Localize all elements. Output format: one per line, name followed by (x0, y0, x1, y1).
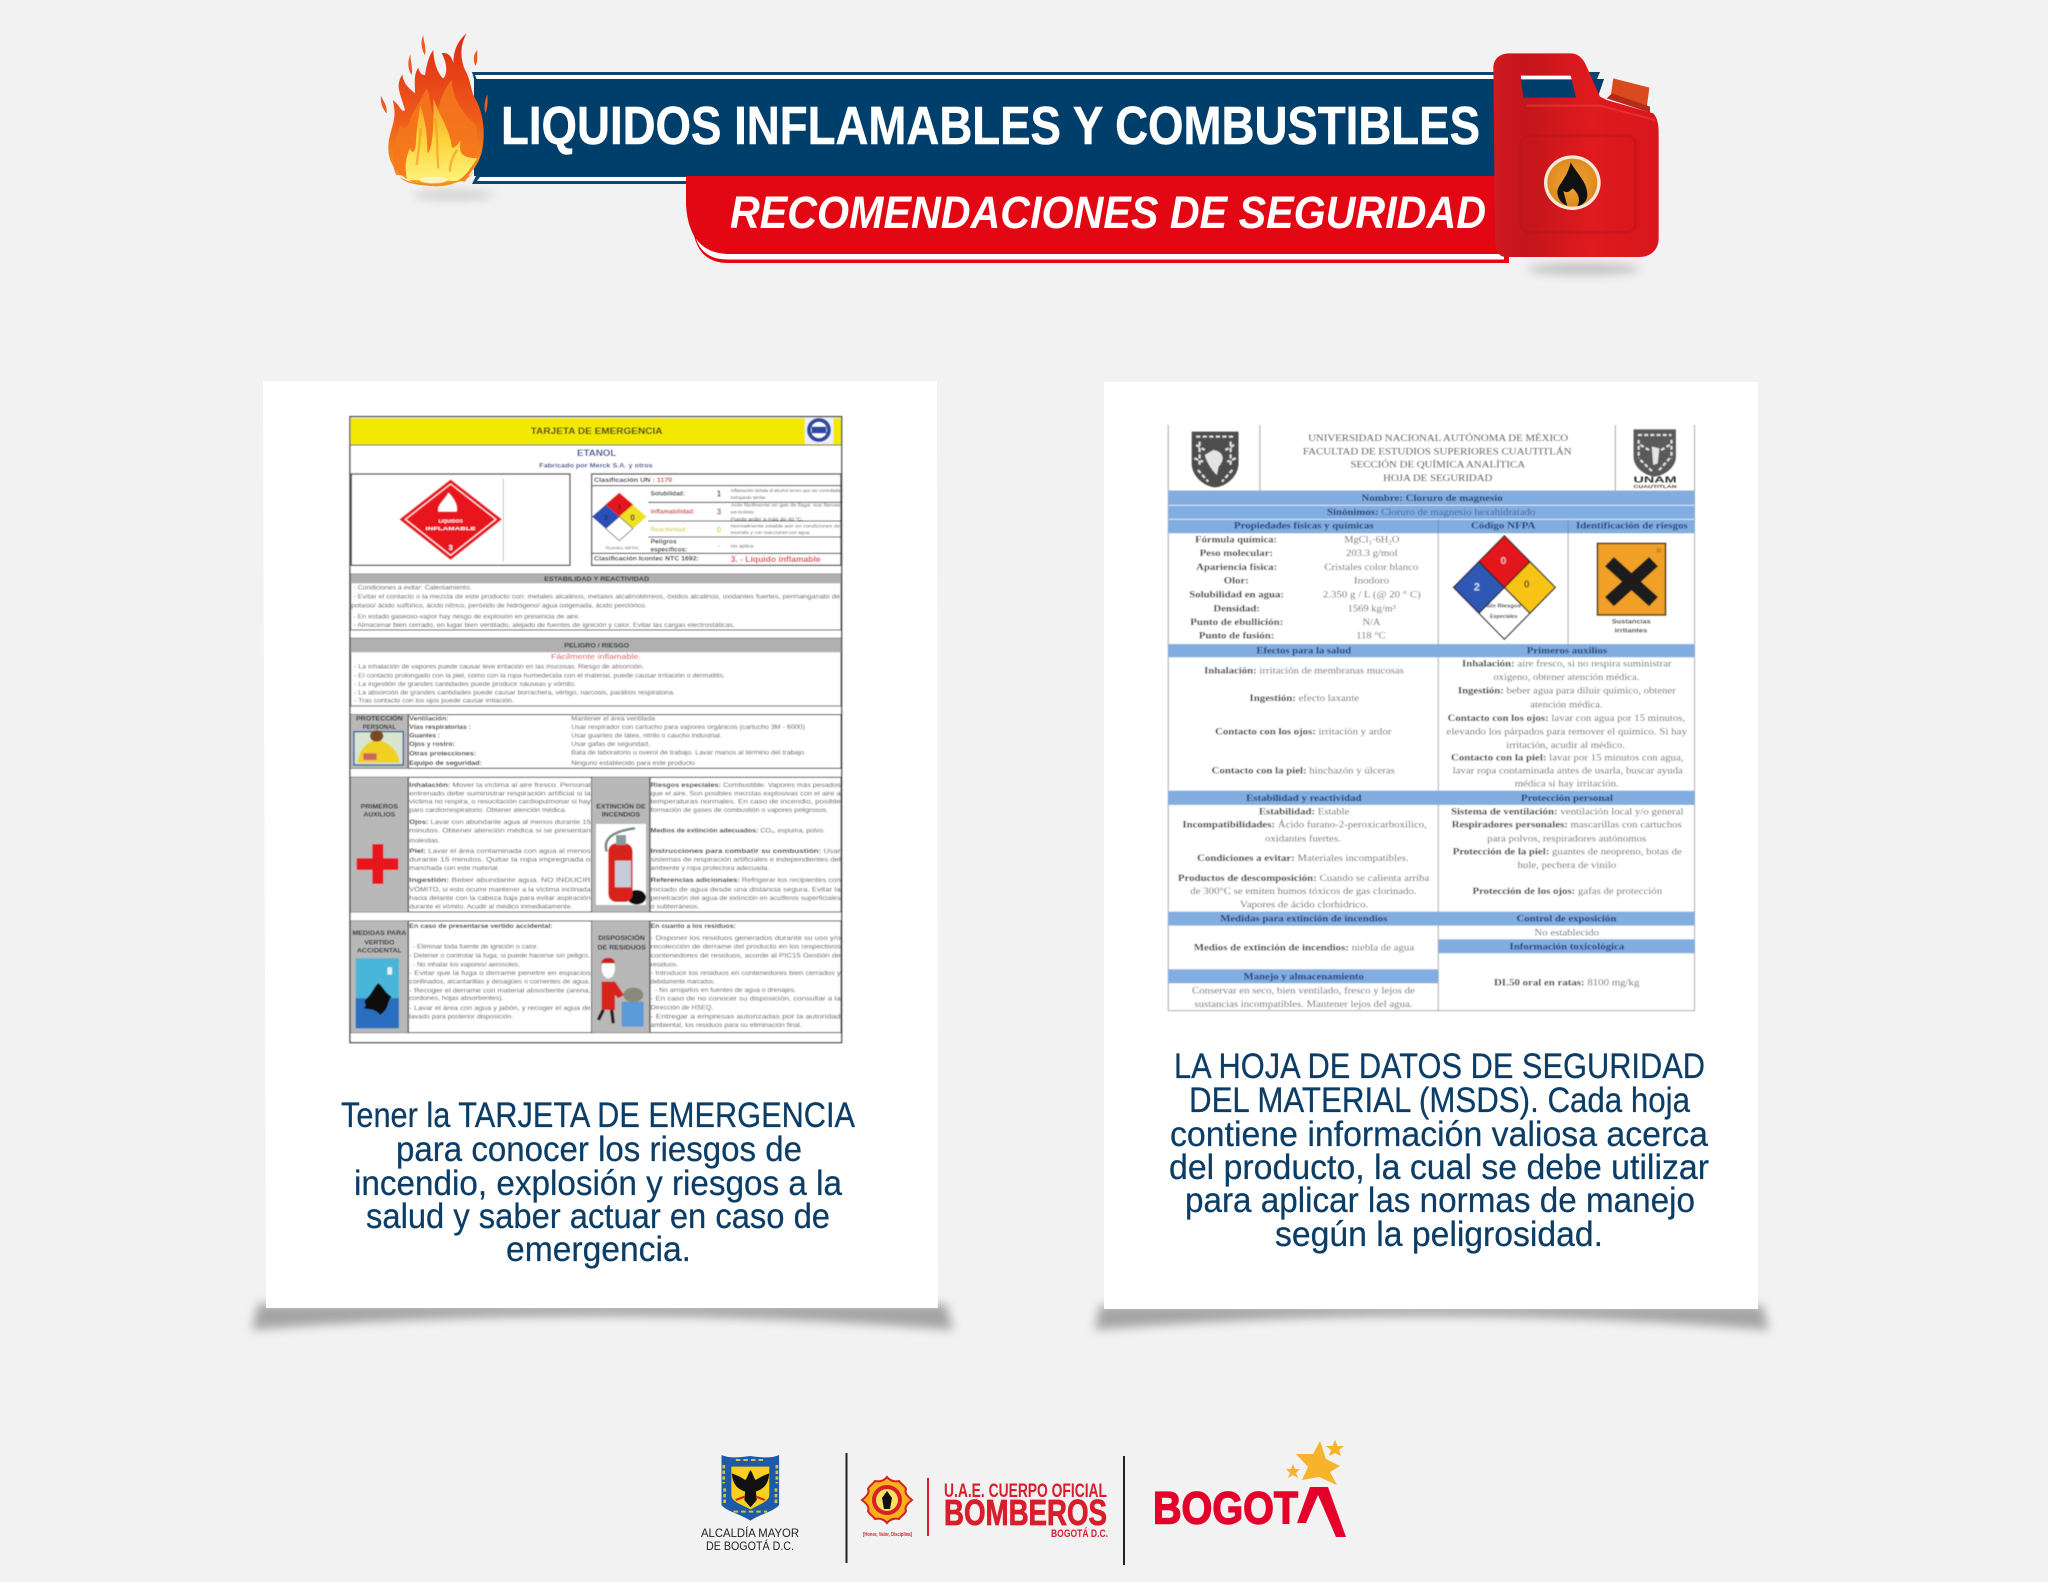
section: primeros auxilios: PRIMEROS (361, 803, 399, 810)
physical and chemical properties: Cristales color blanco (1324, 563, 1419, 573)
icon: irritant hazard square: irritantes (1615, 628, 1648, 635)
section bar headings: Nombre: Cloruro de magnesio (1361, 494, 1503, 504)
section: disposicion de residuos: debidamente marcados. (651, 979, 715, 986)
subtitle: RECOMENDACIONES DE SEGURIDAD (730, 187, 1486, 238)
section: disposicion de residuos: DISPOSICIÓN (598, 933, 645, 942)
caption: hoja de datos: del producto, la cual se debe utilizar (1169, 1148, 1709, 1187)
logo: Bomberos: U.A.E. CUERPO OFICIAL (944, 1481, 1107, 1502)
stability and reactivity: Incompatibilidades: Ácido furano-2-peroxicarboxílico, (1182, 819, 1427, 831)
classification box: 3. - Líquido inflamable (731, 555, 821, 564)
personal protection: Protección de la piel: guantes de neopreno, botas de (1453, 847, 1682, 857)
section: estabilidad y reactividad: - Evitar el contacto o la mezcla de este producto con: metales alcalinos, metales alcalinotérreos, óxidos alcalinos, oxidantes fuertes, permanganato de (353, 593, 840, 600)
caption: hoja de datos: LA HOJA DE DATOS DE SEGURIDAD (1174, 1047, 1705, 1086)
icon: fire extinguisher (596, 824, 646, 905)
fire, exposure, toxicology and storage (1192, 928, 1640, 1010)
section: medidas para vertido accidental: cordones, hojas absorbentes). (409, 995, 503, 1002)
personal protection: hule, pechera de vinilo (1517, 861, 1617, 871)
caption: hoja de datos: según la peligrosidad. (1275, 1215, 1603, 1254)
emergency card document (350, 417, 842, 1043)
physical and chemical properties: 203.3 g/mol (1346, 549, 1398, 559)
stability and reactivity: Vapores de ácido clorhídrico. (1240, 900, 1368, 910)
sheet header with logos: UNIVERSIDAD NACIONAL AUTÓNOMA DE MÉXICO (1308, 432, 1568, 444)
section: disposicion de residuos: Dirección de HSEQ. (651, 1004, 713, 1011)
section bar headings: Efectos para la salud (1256, 646, 1352, 656)
section bar headings: Medidas para extinción de incendios (1220, 915, 1388, 925)
logo divider right (1123, 1456, 1125, 1565)
section: disposicion de residuos: En cuanto a los residuos: (651, 923, 736, 930)
icon: Bomberos emblem (862, 1477, 912, 1523)
section: peligro / riesgo: PELIGRO / RIESGO (564, 643, 629, 650)
section bar headings: Protección personal (1521, 794, 1613, 804)
section bar headings: Código NFPA (1471, 522, 1536, 532)
health effects: Ingestión: efecto laxante (1250, 693, 1359, 704)
caption: hoja de datos: contiene información valiosa acerca (1170, 1115, 1709, 1154)
sheet header with logos (1168, 425, 1695, 491)
section: primeros auxilios: Inhalación: Mover la víctima al aire fresco. Personal (409, 782, 591, 789)
logo divider left (846, 1453, 848, 1563)
section: medidas para vertido accidental: confinados, alcantarillas y desagües o corrientes de agua. (409, 979, 590, 986)
icon: irritant hazard square: Sustancias (1612, 618, 1651, 625)
classification box: Arde fácilmente en gas de llaga; sus llamas (731, 503, 841, 508)
section: proteccion personal: Ventilación: (409, 716, 449, 723)
lower card sections (351, 714, 842, 1033)
section: extincion de incendios: ambiente y ropa protectora adecuada. (651, 865, 769, 872)
section: medidas para vertido accidental: - Lavar el área con agua y jabón, y recoger el agua de (409, 1005, 591, 1012)
section: medidas para vertido accidental: MEDIDAS PARA (352, 930, 407, 937)
section: peligro / riesgo: - La ingestión de grandes cantidades puede producir náuseas y vómito. (354, 681, 576, 688)
classification box: Normalmente estable aún en condiciones de (731, 524, 840, 529)
icon: stylized A and stars (1286, 1440, 1346, 1537)
safety data sheet document (1168, 425, 1695, 1011)
section: primeros auxilios: hacia delante con la cabeza baja para evitar aspiración (409, 895, 591, 902)
first aid: Contacto con los ojos: lavar con agua por 15 minutos, (1448, 714, 1685, 724)
section: peligro / riesgo: - La inhalación de vapores puede causar leve irritación en las mucosas. Riesgo de absorción. (354, 664, 644, 671)
first aid: atención médica. (1530, 700, 1603, 710)
physical and chemical properties: Inodoro (1354, 577, 1389, 587)
section bar headings: Información toxicológica (1510, 942, 1625, 952)
section: medidas para vertido accidental: - Eliminar toda fuente de ignición o calor. (413, 943, 538, 950)
section: extincion de incendios: sistemas de respiración artificiales e independientes del (651, 856, 841, 863)
sheet header with logos: SECCIÓN DE QUÍMICA ANALÍTICA (1350, 459, 1525, 471)
fire, exposure, toxicology and storage: sustancias incompatibles. Mantener lejos del agua. (1194, 1000, 1412, 1010)
section: medidas para vertido accidental: - Recoger el derrame con material absorbente (arena, (409, 987, 591, 994)
hazard placard box (351, 474, 570, 565)
section: estabilidad y reactividad (351, 574, 841, 630)
section bar headings: Manejo y almacenamiento (1244, 972, 1364, 982)
classification box: trabajando similar. (731, 495, 767, 500)
section: peligro / riesgo (351, 638, 841, 706)
personal protection: Sistema de ventilación: ventilación local y/o general (1451, 807, 1684, 817)
section: disposicion de residuos: contenedores de residuos, acorde al PIC15 Gestión de (651, 953, 841, 960)
classification box: Inflamación debida al alcohol tienen que ser controlada (731, 488, 840, 493)
health effects: Contacto con la piel: hinchazón y úlceras (1212, 766, 1395, 776)
section: estabilidad y reactividad: potasio/ ácido sulfúrico, ácido nítrico, peróxido de hidrógeno/ agua oxigenada, ácido perclórico. (351, 602, 647, 609)
logo: Alcaldia Mayor: DE BOGOTÁ D.C. (706, 1538, 794, 1553)
section: extincion de incendios: que el aire. Son posibles mezclas explosivas con el aire a (651, 790, 841, 797)
section: proteccion personal: Otras protecciones: (409, 751, 476, 758)
panel shadow (252, 1304, 953, 1330)
caption: tarjeta de emergencia: incendio, explosión y riesgos a la (354, 1164, 843, 1203)
hazard placard box: LIQUIDOS (439, 518, 463, 524)
card yellow header (350, 418, 842, 445)
section: primeros auxilios: Piel: Lavar el área contaminada con agua al menos (409, 848, 591, 855)
hazard placard box: INFLAMABLE (426, 526, 477, 532)
icon: red fuel canister (1493, 53, 1659, 275)
health effects (1204, 666, 1404, 776)
icon: UNAM shield left (1192, 432, 1239, 487)
section: extincion de incendios: formación de gases de combustión o vapores peligrosos. (651, 807, 828, 814)
section: extincion de incendios: Medios de extinción adecuados: CO₂, espuma, polvo. (651, 828, 825, 835)
logo: Bomberos: [Honor, Valor, Disciplina] (863, 1532, 912, 1538)
classification box: 3 (717, 508, 722, 517)
section: proteccion personal: Usar guantes de látex, nitrilo o caucho industrial. (571, 732, 722, 739)
classification box: Reactividad: (651, 527, 687, 534)
section bar headings: Sinónimos: Cloruro de magnesio hexahidratado (1327, 508, 1536, 518)
section: extincion de incendios: rociado de agua desde una distancia segura. Evitar la (651, 886, 841, 893)
logo: Bomberos: BOMBEROS (944, 1492, 1107, 1533)
first aid: irritación, acudir al médico. (1506, 741, 1625, 751)
icon: Bogota shield (722, 1455, 779, 1521)
stability and reactivity: oxidantes fuertes. (1265, 833, 1341, 844)
panel background (263, 381, 938, 1308)
classification box: Clasificación UN : 1170 (594, 477, 673, 484)
physical and chemical properties: N/A (1363, 618, 1381, 628)
icon: NFPA diamond: Sin Riesgos (1486, 603, 1521, 609)
icon: NFPA diamond: Especiales (1490, 614, 1517, 620)
section: proteccion personal: Vías respiratorias : (409, 724, 471, 731)
personal protection: Protección de los ojos: gafas de protección (1472, 886, 1662, 897)
fire, exposure, toxicology and storage: Medios de extinción de incendios: niebla de agua (1194, 944, 1415, 954)
sheet header with logos: FACULTAD DE ESTUDIOS SUPERIORES CUAUTITLÁN (1303, 445, 1572, 457)
classification box: Rombo NFPA (606, 545, 640, 550)
section: disposicion de residuos: residuos. (651, 962, 678, 969)
classification box: 1 (717, 490, 722, 499)
stability and reactivity: Condiciones a evitar: Materiales incompatibles. (1197, 854, 1409, 864)
icon: red cross (357, 844, 398, 884)
first aid: Inhalación: aire fresco, si no respira suministrar (1462, 659, 1672, 670)
fire, exposure, toxicology and storage: DL50 oral en ratas: 8100 mg/kg (1494, 978, 1640, 988)
first aid: elevando los párpados para remover el químico. Si hay (1447, 727, 1687, 737)
section: disposicion de residuos: - En caso de no conocer su disposición, consultar a la (651, 996, 841, 1003)
section: medidas para vertido accidental (351, 921, 592, 1033)
section: extincion de incendios: EXTINCIÓN DE (596, 801, 646, 810)
section: estabilidad y reactividad: - En estado gaseoso-vapor hay riesgo de explosión en presencia de aire. (353, 613, 580, 620)
section bar headings: Estabilidad y reactividad (1246, 794, 1362, 804)
health effects: Inhalación: irritación de membranas mucosas (1204, 666, 1404, 676)
physical and chemical properties: Solubilidad en agua: (1189, 591, 1284, 601)
section: primeros auxilios: VÓMITO, si esto ocurre mantener a la víctima inclinada (409, 884, 591, 893)
physical and chemical properties: Densidad: (1213, 604, 1260, 614)
stability and reactivity: Estabilidad: Estable (1259, 807, 1349, 817)
caption: hoja de datos (1169, 1047, 1709, 1254)
physical and chemical properties: Olor: (1224, 577, 1249, 587)
icon: spill (356, 958, 399, 1028)
section: extincion de incendios: Riesgos especiales: Combustible. Vapores más pesados (651, 782, 841, 789)
section: proteccion personal: Usar gafas de seguridad. (571, 741, 650, 748)
first aid: médica si hay irritación. (1515, 780, 1619, 790)
section: extincion de incendios: INCENDIOS (602, 812, 641, 819)
classification box: - (718, 543, 720, 549)
classification box: incendio y con reacciones con agua. (731, 530, 811, 535)
first aid: Contacto con la piel: lavar por 15 minutos con agua, (1451, 754, 1683, 764)
hazard placard box: 3 (449, 543, 453, 552)
subtitle ribbon (686, 176, 1510, 263)
section: extincion de incendios: Referencias adicionales: Refrigerar los recipientes con (651, 877, 841, 884)
panel: hoja de datos de seguridad (1095, 382, 1769, 1330)
stability and reactivity: de 300°C se emiten humos tóxicos de gas clorinado. (1190, 886, 1417, 897)
section: proteccion personal: Ninguno establecido para este producto (571, 760, 695, 767)
section: peligro / riesgo: - Tras contacto con los ojos puede causar irritación. (354, 698, 514, 705)
classification box: Solubilidad: (651, 490, 685, 497)
section: medidas para vertido accidental: En caso de presentarse vertido accidental: (409, 923, 553, 930)
section: disposicion de residuos: - Disponer los residuos generados durante su uso y/o (651, 935, 841, 942)
section bar headings (1220, 494, 1688, 982)
sheet header with logos: HOJA DE SEGURIDAD (1383, 474, 1493, 484)
first aid (1447, 659, 1687, 790)
section bar headings: Identificación de riesgos (1576, 522, 1688, 532)
divider (927, 1478, 929, 1536)
section: peligro / riesgo: - La absorción de grandes cantidades puede causar borrachera, vértigo, narcosis, parálisis respiratoria. (354, 689, 675, 696)
section bar headings: Primeros auxilios (1527, 646, 1607, 656)
section: primeros auxilios: Ingestión: Beber abundante agua. NO INDUCIR (409, 877, 591, 884)
classification box: específicos: (651, 546, 687, 553)
first aid: oxígeno, obtener atención médica. (1493, 673, 1639, 683)
footer logos (701, 1440, 1346, 1565)
section: proteccion personal: Ojos y rostro: (409, 741, 455, 748)
section: proteccion personal: Usar respirador con cartucho para vapores orgánicos (cartucho 3M - 6000) (571, 724, 805, 731)
section: primeros auxilios: víctima no respira, o resucitación cardiopulmonar si hay (409, 799, 591, 806)
NFPA diamond: 0 (630, 514, 635, 523)
personal protection (1451, 807, 1684, 897)
section: estabilidad y reactividad: - Almacenar bien cerrado, en lugar bien ventilado, alejado de fuentes de ignición y calor. Evitar las cargas electrostáticas. (353, 622, 735, 629)
first aid: lavar ropa contaminada antes de usarla, buscar ayuda (1453, 766, 1684, 776)
personal protection: para polvos, respiradores autónomos (1487, 834, 1647, 844)
section: medidas para vertido accidental: - Evitar que la fuga o derrame penetre en espacios (409, 970, 591, 977)
panel: tarjeta de emergencia (252, 381, 953, 1330)
classification box: Puede arder a más de 40 ºC. (731, 517, 803, 522)
physical and chemical properties: Punto de fusión: (1199, 632, 1274, 642)
Alcaldia text: ALCALDÍA MAYOR (701, 1525, 799, 1540)
physical and chemical properties: Punto de ebullición: (1190, 618, 1283, 628)
section: disposicion de residuos: - No arrojarlos en fuentes de agua o drenajes. (655, 987, 796, 994)
caption: tarjeta de emergencia: para conocer los riesgos de (396, 1130, 802, 1169)
section: primeros auxilios: AUXILIOS (363, 812, 396, 819)
section: medidas para vertido accidental: VERTIDO (364, 939, 394, 946)
section: disposicion de residuos: recolección de derrame del producto en los respectivos (651, 944, 841, 951)
health effects: Contacto con los ojos: irritación y ardor (1215, 727, 1392, 737)
caption: tarjeta de emergencia: Tener la TARJETA DE EMERGENCIA (341, 1096, 856, 1135)
section: primeros auxilios: durante el vómito. Acudir al médico inmediatamente. (409, 904, 573, 911)
section bar headings: Propiedades físicas y químicas (1234, 522, 1374, 532)
physical and chemical properties: MgCl₂·6H₂O (1344, 536, 1400, 546)
section: estabilidad y reactividad: ESTABILIDAD Y REACTIVIDAD (544, 576, 649, 583)
panel background (1104, 382, 1758, 1309)
logo: Bogota (1153, 1440, 1346, 1537)
section: medidas para vertido accidental: lavado para posterior disposición. (409, 1013, 513, 1020)
section: primeros auxilios: manchada con este material. (409, 865, 499, 872)
classification box (592, 474, 841, 565)
logo: Bogota: BOGOT (1153, 1482, 1298, 1534)
caption: tarjeta de emergencia: salud y saber actuar en caso de (366, 1197, 830, 1236)
icon: UNAM logo right: CUAUTITLÁN (1634, 484, 1677, 489)
physical and chemical properties (1189, 536, 1421, 642)
icon: UNAM logo right (1634, 429, 1677, 489)
main title: LIQUIDOS INFLAMABLES Y COMBUSTIBLES (501, 96, 1480, 156)
classification box: Peligros (651, 538, 677, 545)
card yellow header: TARJETA DE EMERGENCIA (531, 426, 663, 436)
section: medidas para vertido accidental: ACCIDENTAL (357, 948, 402, 955)
stability and reactivity (1178, 807, 1430, 910)
icon: UNAM logo right: UNAM (1634, 475, 1677, 484)
section: disposicion de residuos (592, 921, 841, 1033)
caption: tarjeta de emergencia: emergencia. (506, 1230, 691, 1269)
fire, exposure, toxicology and storage: No establecido (1534, 928, 1599, 938)
icon: flame (381, 33, 493, 200)
section: proteccion personal: Guantes : (409, 733, 440, 740)
first aid: Ingestión: beber agua para diluir químico, obtener (1458, 686, 1677, 696)
caption: hoja de datos: DEL MATERIAL (MSDS). Cada hoja (1189, 1081, 1690, 1120)
section: proteccion personal: PROTECCIÓN (356, 714, 403, 723)
section: extincion de incendios: penetración del agua de extinción en acuíferos superficiales (651, 895, 841, 902)
section: primeros auxilios: durante 15 minutos. Quitar la ropa impregnada o (409, 857, 591, 864)
icon: NFPA diamond: 2 (1474, 582, 1480, 594)
section: extincion de incendios: o subterráneos. (651, 904, 699, 911)
emergency card document: Fabricado por Merck S.A. y otros (539, 463, 653, 470)
section: extincion de incendios: Instrucciones para combatir su combustión: Usar (651, 848, 842, 855)
NFPA diamond: 3 (617, 504, 621, 511)
icon: NFPA diamond: 0 (1524, 579, 1530, 590)
title banner (472, 72, 1604, 263)
physical and chemical properties: 1569 kg/m³ (1348, 604, 1396, 614)
fire, exposure, toxicology and storage: Conservar en seco, bien ventilado, fresco y lejos de (1192, 986, 1415, 997)
section: primeros auxilios: molestias. (409, 837, 440, 844)
section: disposicion de residuos: DE RESIDUOS (597, 944, 646, 951)
section: primeros auxilios: paro cardiorrespiratorio. Obtener atención médica. (409, 807, 567, 814)
logo: Alcaldia Mayor (701, 1455, 799, 1553)
section: peligro / riesgo: Fácilmente inflamable. (551, 654, 641, 661)
physical and chemical properties: Fórmula química: (1195, 536, 1277, 546)
section: primeros auxilios: Ojos: Lavar con abundante agua al menos durante 15 (409, 819, 591, 826)
icon: irritant hazard square (1597, 543, 1666, 635)
personal protection: Respiradores personales: mascarillas con cartuchos (1452, 821, 1682, 831)
logo: Bomberos: BOGOTÁ D.C. (1051, 1527, 1108, 1540)
section: peligro / riesgo: - El contacto prolongado con la piel, como con la ropa humedecida con el material, puede causar irritación o dermatitis. (354, 672, 725, 679)
panel shadow (1095, 1305, 1769, 1330)
section: proteccion personal (351, 714, 841, 768)
classification box: son incoloras. (731, 509, 755, 514)
sheet grid (1168, 491, 1695, 1011)
logo: Bomberos (862, 1477, 1108, 1540)
section: primeros auxilios (351, 777, 592, 912)
section: medidas para vertido accidental: - No inhalar los vapores/ aerosoles. (413, 962, 520, 969)
caption: tarjeta de emergencia (341, 1096, 856, 1269)
icon: person with bin (598, 958, 644, 1027)
classification box: 0 (717, 526, 722, 535)
NFPA diamond (592, 493, 647, 541)
section: estabilidad y reactividad: - Condiciones a evitar: Calentamiento. (353, 584, 472, 591)
section: disposicion de residuos: ambiental, los residuos para su eliminación final. (651, 1022, 802, 1029)
icon: NFPA diamond (1453, 536, 1555, 639)
NFPA diamond: 3 (604, 513, 608, 522)
section: disposicion de residuos: - Introducir los residuos en contenedores bien cerrados y (651, 970, 841, 977)
physical and chemical properties: Peso molecular: (1200, 549, 1273, 559)
classification box: No aplica (731, 543, 754, 548)
section: proteccion personal: Bata de laboratorio u overol de trabajo. Lavar manos al término del trabajo. (571, 749, 806, 756)
product name: ETANOL (577, 448, 617, 458)
section: primeros auxilios: minutos. Obtener atención médica si se presentan (409, 828, 591, 835)
section: disposicion de residuos: - Entregar a empresas autorizadas por la autoridad (651, 1013, 841, 1020)
section: primeros auxilios: entrenado debe suministrar respiración artificial si la (409, 790, 591, 797)
caption: hoja de datos: para aplicar las normas de manejo (1185, 1181, 1695, 1220)
section bar headings: Control de exposición (1516, 915, 1617, 925)
physical and chemical properties: Apariencia física: (1196, 563, 1277, 573)
icon: NFPA diamond: 0 (1500, 556, 1507, 567)
stability and reactivity: Productos de descomposición: Cuando se calienta arriba (1178, 874, 1430, 884)
section: proteccion personal: Equipo de seguridad: (409, 760, 482, 767)
section: proteccion personal: PERSONAL (363, 724, 396, 731)
classification box: Inflamabilidad: (651, 509, 695, 516)
icon: irritant hazard square: Xi (1656, 548, 1661, 555)
classification box: Clasificación Icontec NTC 1692: (594, 556, 699, 563)
physical and chemical properties: 2.350 g / L (@ 20 ° C) (1323, 590, 1421, 601)
banner top stripe (472, 72, 1604, 184)
physical and chemical properties: 118 °C (1356, 631, 1386, 642)
section: extincion de incendios: temperaturas normales. En caso de incendio, posible (651, 799, 841, 806)
section: extincion de incendios (592, 777, 842, 912)
section: proteccion personal: Mantener el área ventilada (571, 716, 655, 723)
section: medidas para vertido accidental: - Detener o controlar la fuga, si puede hacerse sin peligro. (409, 953, 590, 960)
